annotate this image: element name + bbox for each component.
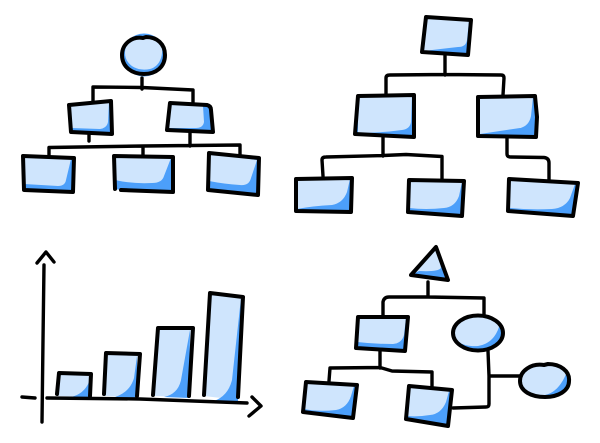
connectors: square chart (322, 55, 549, 180)
box: bottom row middle (114, 156, 173, 192)
icon: ellipse leaf node (520, 364, 570, 398)
panel: org chart with circle top (23, 34, 259, 195)
box: bottom row left (23, 156, 74, 192)
icon: triangle (411, 247, 448, 280)
connectors: mixed chart (329, 282, 520, 408)
connectors: circle chart (49, 78, 240, 155)
panel: mixed shapes chart (303, 247, 570, 426)
arrow: vertical axis (37, 252, 54, 422)
box: bottom row third (508, 179, 578, 216)
bar 4 (204, 293, 243, 401)
bar 2 (104, 353, 140, 398)
panel: org chart with square top (296, 17, 578, 216)
box: second row right (167, 103, 213, 132)
box: bottom row right (406, 386, 452, 426)
panel: bar chart (22, 252, 261, 422)
axis tick (22, 397, 35, 398)
box: bottom row left (303, 382, 357, 418)
box: bottom row second (408, 180, 464, 216)
box: bottom row right (208, 153, 259, 195)
icon: top circle (122, 34, 166, 76)
bar 1 (57, 373, 91, 397)
box: second row left (69, 101, 112, 134)
arrow: horizontal axis (47, 397, 261, 416)
box: top square (422, 17, 471, 55)
bar 3 (153, 328, 193, 398)
box: second row left (355, 95, 414, 137)
box: second row (356, 317, 408, 351)
box: bottom row first (296, 178, 352, 212)
icon: ellipse node (453, 316, 503, 350)
box: second row right (478, 96, 537, 137)
